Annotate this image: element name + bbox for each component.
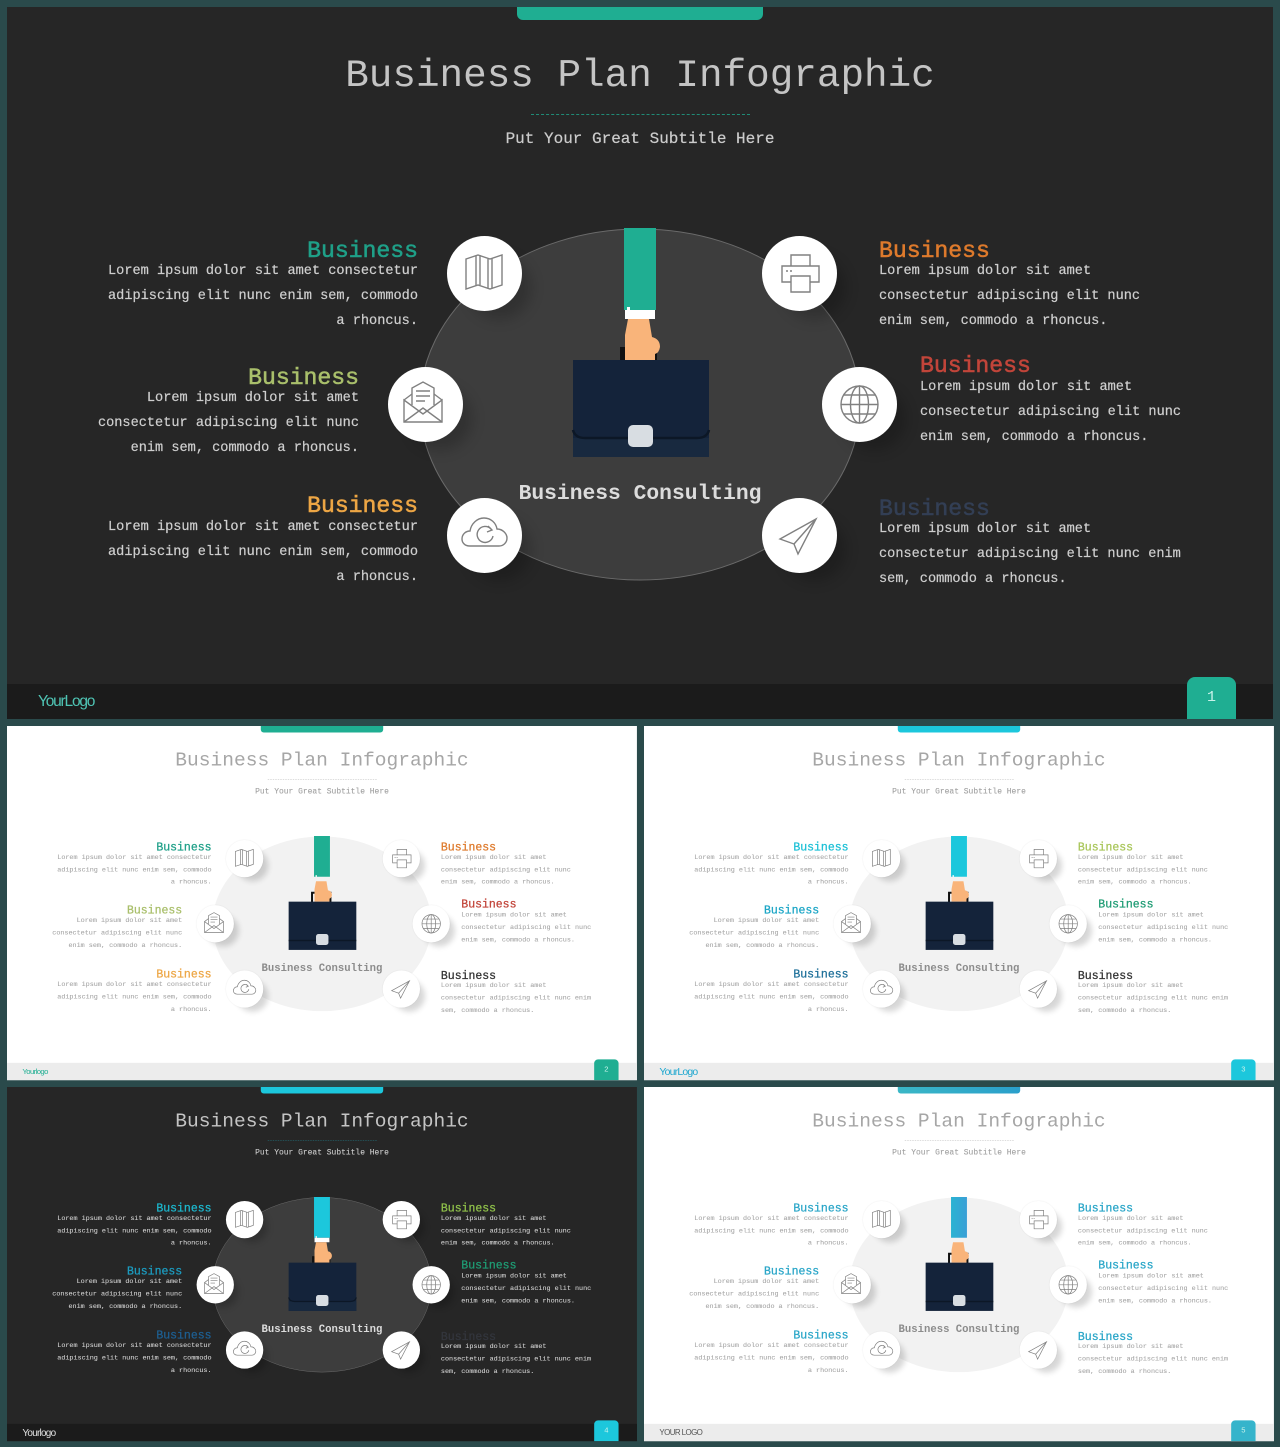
logo: YourLogo bbox=[659, 1066, 697, 1077]
text block: left top: Business bbox=[156, 841, 211, 854]
text block: left middle: consectetur adipiscing elit nunc bbox=[98, 416, 359, 431]
icon: paper plane bbox=[382, 970, 420, 1008]
text block: right bottom: Business bbox=[440, 969, 496, 982]
label: Business Consulting: Business Consulting bbox=[898, 1323, 1019, 1335]
text block: left top: Lorem ipsum dolor sit amet consectetur bbox=[57, 854, 211, 861]
icon: paper plane bbox=[762, 498, 837, 573]
text block: left bottom: a rhoncus. bbox=[336, 570, 418, 585]
icon: paper plane bbox=[1019, 970, 1057, 1008]
text block: left bottom: Business bbox=[793, 968, 848, 981]
text block: left top bbox=[694, 1202, 848, 1247]
slide 5: light blue gradient bbox=[644, 1087, 1274, 1442]
text block: left middle: Business bbox=[763, 1265, 819, 1278]
subtitle: Put Your Great Subtitle Here bbox=[506, 130, 774, 148]
text block: right top: enim sem, commodo a rhoncus. bbox=[879, 314, 1107, 329]
text block: left bottom: Business bbox=[793, 1329, 848, 1342]
text block: right top bbox=[1077, 841, 1208, 886]
logo: YOUR LOGO bbox=[659, 1428, 702, 1437]
text block: right bottom bbox=[440, 1330, 591, 1376]
text block: right middle: Business bbox=[1098, 898, 1153, 911]
text block: left bottom: adipiscing elit nunc enim sem, commodo bbox=[57, 1355, 211, 1362]
text block: right top: Business bbox=[879, 238, 990, 264]
text block: right middle: Lorem ipsum dolor sit amet bbox=[1098, 1273, 1203, 1280]
text block: left top bbox=[694, 841, 848, 886]
page number: 5 bbox=[1241, 1426, 1245, 1435]
text block: left bottom: Lorem ipsum dolor sit amet consectetur bbox=[57, 1342, 211, 1350]
text block: left top: Lorem ipsum dolor sit amet consectetur bbox=[57, 1215, 211, 1222]
text block: right middle: enim sem, commodo a rhoncus. bbox=[461, 937, 574, 944]
text block: left top: adipiscing elit nunc enim sem, commodo bbox=[694, 1227, 848, 1235]
subtitle: Put Your Great Subtitle Here bbox=[255, 1148, 388, 1157]
top accent tab bbox=[517, 7, 763, 20]
title: Business Plan Infographic bbox=[812, 1110, 1105, 1132]
icon: globe bbox=[822, 367, 897, 442]
text block: right bottom bbox=[440, 969, 591, 1015]
text block: left top: Lorem ipsum dolor sit amet consectetur bbox=[108, 264, 418, 279]
page number bbox=[1187, 677, 1236, 719]
icon: map bbox=[862, 840, 900, 877]
text block: left middle: enim sem, commodo a rhoncus. bbox=[68, 1303, 182, 1310]
icon: map bbox=[225, 1201, 263, 1238]
text block: right top: enim sem, commodo a rhoncus. bbox=[1077, 1240, 1191, 1247]
icon: printer bbox=[1019, 840, 1057, 877]
text block: right middle bbox=[1098, 1259, 1228, 1305]
icon: map bbox=[225, 840, 263, 877]
page number bbox=[594, 1059, 618, 1080]
text block: left middle: consectetur adipiscing elit nunc bbox=[52, 1291, 182, 1298]
logo: YourLogo bbox=[38, 693, 94, 710]
label: Business Consulting: Business Consulting bbox=[898, 962, 1019, 974]
title: Business Plan Infographic bbox=[812, 749, 1105, 771]
slide 1: dark large bbox=[7, 7, 1273, 719]
text block: right bottom: sem, commodo a rhoncus. bbox=[440, 1007, 534, 1015]
text block: right middle: enim sem, commodo a rhoncus. bbox=[461, 1298, 574, 1305]
text block: left top: a rhoncus. bbox=[807, 1240, 848, 1247]
icon: mail bbox=[196, 1266, 233, 1303]
text block: right top: consectetur adipiscing elit nunc bbox=[879, 289, 1140, 304]
text block: left top bbox=[57, 1202, 212, 1247]
text block: left middle: enim sem, commodo a rhoncus. bbox=[131, 441, 359, 456]
text block: right top bbox=[440, 1202, 570, 1247]
text block: left middle bbox=[689, 1265, 819, 1310]
text block: left middle bbox=[98, 365, 359, 456]
icon: cloud bbox=[862, 1331, 900, 1369]
subtitle: Put Your Great Subtitle Here bbox=[892, 1148, 1025, 1157]
text block: right middle: enim sem, commodo a rhoncus. bbox=[920, 430, 1148, 445]
central illustration: hand holding briefcase bbox=[852, 836, 1066, 1011]
text block: left bottom: a rhoncus. bbox=[170, 1006, 211, 1014]
subtitle: Put Your Great Subtitle Here bbox=[255, 787, 388, 796]
text block: left bottom: Lorem ipsum dolor sit amet consectetur bbox=[694, 1342, 848, 1350]
icon: paper plane bbox=[1019, 1331, 1057, 1369]
text block: right middle: Business bbox=[461, 898, 516, 911]
text block: left bottom bbox=[108, 493, 418, 585]
icon: cloud bbox=[862, 970, 900, 1008]
text block: left middle bbox=[52, 1265, 182, 1310]
text block: right middle bbox=[1098, 898, 1228, 944]
text block: left bottom: Lorem ipsum dolor sit amet consectetur bbox=[694, 981, 848, 989]
text block: left middle: enim sem, commodo a rhoncus. bbox=[705, 1303, 819, 1310]
text block: right bottom: Lorem ipsum dolor sit amet bbox=[440, 1343, 546, 1351]
text block: right bottom: consectetur adipiscing elit nunc enim bbox=[440, 995, 591, 1002]
text block: left middle bbox=[52, 904, 182, 949]
text block: left middle: Business bbox=[248, 365, 359, 391]
text block: left middle: Lorem ipsum dolor sit amet bbox=[76, 1278, 182, 1286]
icon: printer bbox=[762, 236, 837, 311]
text block: right bottom: consectetur adipiscing elit nunc enim bbox=[1077, 995, 1228, 1002]
top accent tab bbox=[897, 726, 1020, 732]
text block: right middle: enim sem, commodo a rhoncus. bbox=[1098, 1298, 1211, 1305]
text block: left bottom: Business bbox=[156, 1329, 211, 1342]
text block: right middle: consectetur adipiscing elit nunc bbox=[1098, 924, 1228, 932]
text block: left bottom: a rhoncus. bbox=[170, 1367, 211, 1375]
text block: right top bbox=[1077, 1202, 1208, 1247]
text block: right middle: enim sem, commodo a rhoncus. bbox=[1098, 937, 1211, 944]
text block: left middle: Lorem ipsum dolor sit amet bbox=[713, 917, 819, 925]
top accent tab bbox=[897, 1087, 1020, 1093]
text block: right middle bbox=[920, 353, 1181, 445]
central illustration: hand holding briefcase bbox=[215, 1197, 430, 1372]
text block: right bottom: Business bbox=[440, 1330, 496, 1343]
text block: left top: a rhoncus. bbox=[807, 879, 848, 886]
text block: right top: Business bbox=[440, 1202, 496, 1215]
text block: left middle: consectetur adipiscing elit nunc bbox=[689, 1291, 819, 1298]
text block: right bottom: consectetur adipiscing elit nunc enim bbox=[879, 547, 1181, 562]
text block: right middle bbox=[461, 898, 591, 944]
text block: left top: Business bbox=[793, 1202, 848, 1215]
text block: left top: Lorem ipsum dolor sit amet consectetur bbox=[694, 1215, 848, 1222]
text block: left bottom bbox=[694, 1329, 848, 1375]
text block: left top: Lorem ipsum dolor sit amet consectetur bbox=[694, 854, 848, 861]
text block: left middle: consectetur adipiscing elit nunc bbox=[689, 930, 819, 937]
icon: mail bbox=[833, 905, 870, 942]
text block: right top: consectetur adipiscing elit nunc bbox=[1077, 1227, 1207, 1235]
central illustration: hand holding briefcase bbox=[215, 836, 428, 1011]
title: Business Plan Infographic bbox=[345, 53, 935, 98]
text block: left top: a rhoncus. bbox=[170, 879, 211, 886]
text block: right bottom: Business bbox=[1077, 969, 1133, 982]
text block: left top bbox=[108, 238, 418, 329]
text block: left bottom bbox=[694, 968, 848, 1014]
text block: right bottom bbox=[1077, 1330, 1228, 1376]
top accent tab bbox=[260, 1087, 383, 1093]
text block: right bottom: Lorem ipsum dolor sit amet bbox=[1077, 1343, 1183, 1351]
central illustration: hand holding briefcase bbox=[424, 228, 856, 580]
text block: left bottom: a rhoncus. bbox=[807, 1006, 848, 1014]
logo: Yourlogo bbox=[22, 1427, 55, 1438]
text block: left bottom: a rhoncus. bbox=[807, 1367, 848, 1375]
icon: cloud bbox=[225, 970, 263, 1008]
icon: globe bbox=[1049, 905, 1086, 942]
text block: right middle: Lorem ipsum dolor sit amet bbox=[1098, 912, 1203, 919]
text block: right middle: consectetur adipiscing elit nunc bbox=[920, 405, 1181, 420]
text block: right bottom: consectetur adipiscing elit nunc enim bbox=[440, 1356, 591, 1363]
text block: left middle: Lorem ipsum dolor sit amet bbox=[76, 917, 182, 925]
text block: left top: adipiscing elit nunc enim sem, commodo bbox=[57, 866, 211, 874]
icon: cloud bbox=[447, 498, 522, 573]
text block: left top: Business bbox=[156, 1202, 211, 1215]
text block: right top: Lorem ipsum dolor sit amet bbox=[879, 264, 1091, 279]
icon: globe bbox=[412, 905, 449, 942]
text block: left middle: Business bbox=[126, 904, 182, 917]
text block: left bottom: Business bbox=[307, 493, 418, 519]
icon: cloud bbox=[225, 1331, 263, 1369]
page number: 1 bbox=[1207, 689, 1216, 706]
text block: right bottom: Lorem ipsum dolor sit amet bbox=[1077, 982, 1183, 990]
page number: 3 bbox=[1241, 1065, 1245, 1074]
text block: right middle bbox=[461, 1259, 591, 1305]
text block: left middle bbox=[689, 904, 819, 949]
page number bbox=[594, 1420, 618, 1441]
text block: right top: enim sem, commodo a rhoncus. bbox=[1077, 879, 1191, 886]
text block: right middle: consectetur adipiscing elit nunc bbox=[461, 1285, 591, 1293]
text block: left middle: enim sem, commodo a rhoncus. bbox=[68, 942, 182, 949]
logo: Yourlogo bbox=[22, 1067, 47, 1076]
text block: left top: adipiscing elit nunc enim sem, commodo bbox=[57, 1227, 211, 1235]
icon: paper plane bbox=[382, 1331, 420, 1369]
icon: globe bbox=[1049, 1266, 1086, 1303]
label: Business Consulting: Business Consulting bbox=[261, 962, 382, 974]
text block: left bottom: Lorem ipsum dolor sit amet consectetur bbox=[108, 520, 418, 535]
text block: left bottom: Business bbox=[156, 968, 211, 981]
central illustration: hand holding briefcase bbox=[852, 1197, 1066, 1372]
icon: mail bbox=[196, 905, 233, 942]
text block: left middle: enim sem, commodo a rhoncus. bbox=[705, 942, 819, 949]
text block: right top: Lorem ipsum dolor sit amet bbox=[1077, 1215, 1183, 1222]
text block: right bottom: sem, commodo a rhoncus. bbox=[1077, 1007, 1171, 1015]
subtitle: Put Your Great Subtitle Here bbox=[892, 787, 1025, 796]
text block: left top: Business bbox=[793, 841, 848, 854]
text block: left middle: Lorem ipsum dolor sit amet bbox=[713, 1278, 819, 1286]
text block: left bottom bbox=[57, 1329, 212, 1375]
text block: left bottom: Lorem ipsum dolor sit amet consectetur bbox=[57, 981, 211, 989]
slide 3: light cyan bbox=[644, 726, 1274, 1080]
text block: right top: Lorem ipsum dolor sit amet bbox=[1077, 854, 1183, 861]
page number: 4 bbox=[604, 1426, 608, 1435]
label: Business Consulting: Business Consulting bbox=[261, 1323, 382, 1335]
text block: right bottom: Lorem ipsum dolor sit amet bbox=[879, 522, 1091, 537]
icon: map bbox=[447, 236, 522, 311]
icon: printer bbox=[382, 840, 420, 877]
text block: left middle: Business bbox=[126, 1265, 182, 1278]
top accent tab bbox=[260, 726, 383, 732]
text block: right bottom: Lorem ipsum dolor sit amet bbox=[440, 982, 546, 990]
text block: right bottom bbox=[879, 496, 1181, 587]
text block: right bottom: consectetur adipiscing elit nunc enim bbox=[1077, 1356, 1228, 1363]
text block: right top: enim sem, commodo a rhoncus. bbox=[440, 879, 554, 886]
text block: right middle: consectetur adipiscing elit nunc bbox=[461, 924, 591, 932]
slide 4: dark cyan bbox=[7, 1087, 637, 1442]
text block: right top: Business bbox=[440, 841, 496, 854]
icon: map bbox=[862, 1201, 900, 1238]
text block: right middle: Business bbox=[1098, 1259, 1153, 1272]
text block: left middle: Business bbox=[763, 904, 819, 917]
title: Business Plan Infographic bbox=[175, 1110, 468, 1132]
text block: left top: a rhoncus. bbox=[336, 314, 418, 329]
text block: right top: Business bbox=[1077, 1202, 1133, 1215]
text block: left bottom: adipiscing elit nunc enim sem, commodo bbox=[108, 545, 418, 560]
text block: left middle: consectetur adipiscing elit nunc bbox=[52, 930, 182, 937]
text block: left bottom: adipiscing elit nunc enim sem, commodo bbox=[694, 994, 848, 1001]
text block: right middle: Business bbox=[920, 353, 1031, 379]
page number: 2 bbox=[604, 1065, 608, 1074]
text block: right bottom: Business bbox=[1077, 1330, 1133, 1343]
page number bbox=[1231, 1059, 1255, 1080]
title: Business Plan Infographic bbox=[175, 749, 468, 771]
icon: globe bbox=[412, 1266, 449, 1303]
text block: left top bbox=[57, 841, 212, 886]
text block: right top bbox=[879, 238, 1140, 329]
text block: left top: adipiscing elit nunc enim sem, commodo bbox=[694, 866, 848, 874]
text block: left top: a rhoncus. bbox=[170, 1240, 211, 1247]
text block: left top: Business bbox=[307, 238, 418, 264]
text block: left bottom: adipiscing elit nunc enim sem, commodo bbox=[57, 994, 211, 1001]
text block: left bottom bbox=[57, 968, 212, 1014]
icon: mail bbox=[388, 367, 463, 442]
text block: right middle: Business bbox=[461, 1259, 516, 1272]
text block: right bottom bbox=[1077, 969, 1228, 1015]
page number bbox=[1231, 1420, 1255, 1441]
text block: right bottom: Business bbox=[879, 496, 990, 522]
text block: right top: Lorem ipsum dolor sit amet bbox=[440, 854, 546, 861]
text block: right top: Lorem ipsum dolor sit amet bbox=[440, 1215, 546, 1222]
icon: mail bbox=[833, 1266, 870, 1303]
text block: left middle: Lorem ipsum dolor sit amet bbox=[147, 391, 359, 406]
text block: right top bbox=[440, 841, 570, 886]
text block: left top: adipiscing elit nunc enim sem, commodo bbox=[108, 289, 418, 304]
text block: right top: consectetur adipiscing elit nunc bbox=[440, 866, 570, 874]
text block: right bottom: sem, commodo a rhoncus. bbox=[440, 1368, 534, 1376]
icon: printer bbox=[382, 1201, 420, 1238]
text block: right middle: Lorem ipsum dolor sit amet bbox=[920, 380, 1132, 395]
text block: right bottom: sem, commodo a rhoncus. bbox=[1077, 1368, 1171, 1376]
text block: right middle: Lorem ipsum dolor sit amet bbox=[461, 1273, 566, 1280]
text block: left bottom: adipiscing elit nunc enim sem, commodo bbox=[694, 1355, 848, 1362]
slide 2: light teal bbox=[7, 726, 637, 1080]
text block: right bottom: sem, commodo a rhoncus. bbox=[879, 572, 1067, 587]
icon: printer bbox=[1019, 1201, 1057, 1238]
text block: right top: enim sem, commodo a rhoncus. bbox=[440, 1240, 554, 1247]
text block: right top: consectetur adipiscing elit nunc bbox=[1077, 866, 1207, 874]
text block: right middle: consectetur adipiscing elit nunc bbox=[1098, 1285, 1228, 1293]
label: Business Consulting: Business Consulting bbox=[519, 482, 761, 506]
text block: right middle: Lorem ipsum dolor sit amet bbox=[461, 912, 566, 919]
text block: right top: consectetur adipiscing elit nunc bbox=[440, 1227, 570, 1235]
text block: right top: Business bbox=[1077, 841, 1133, 854]
